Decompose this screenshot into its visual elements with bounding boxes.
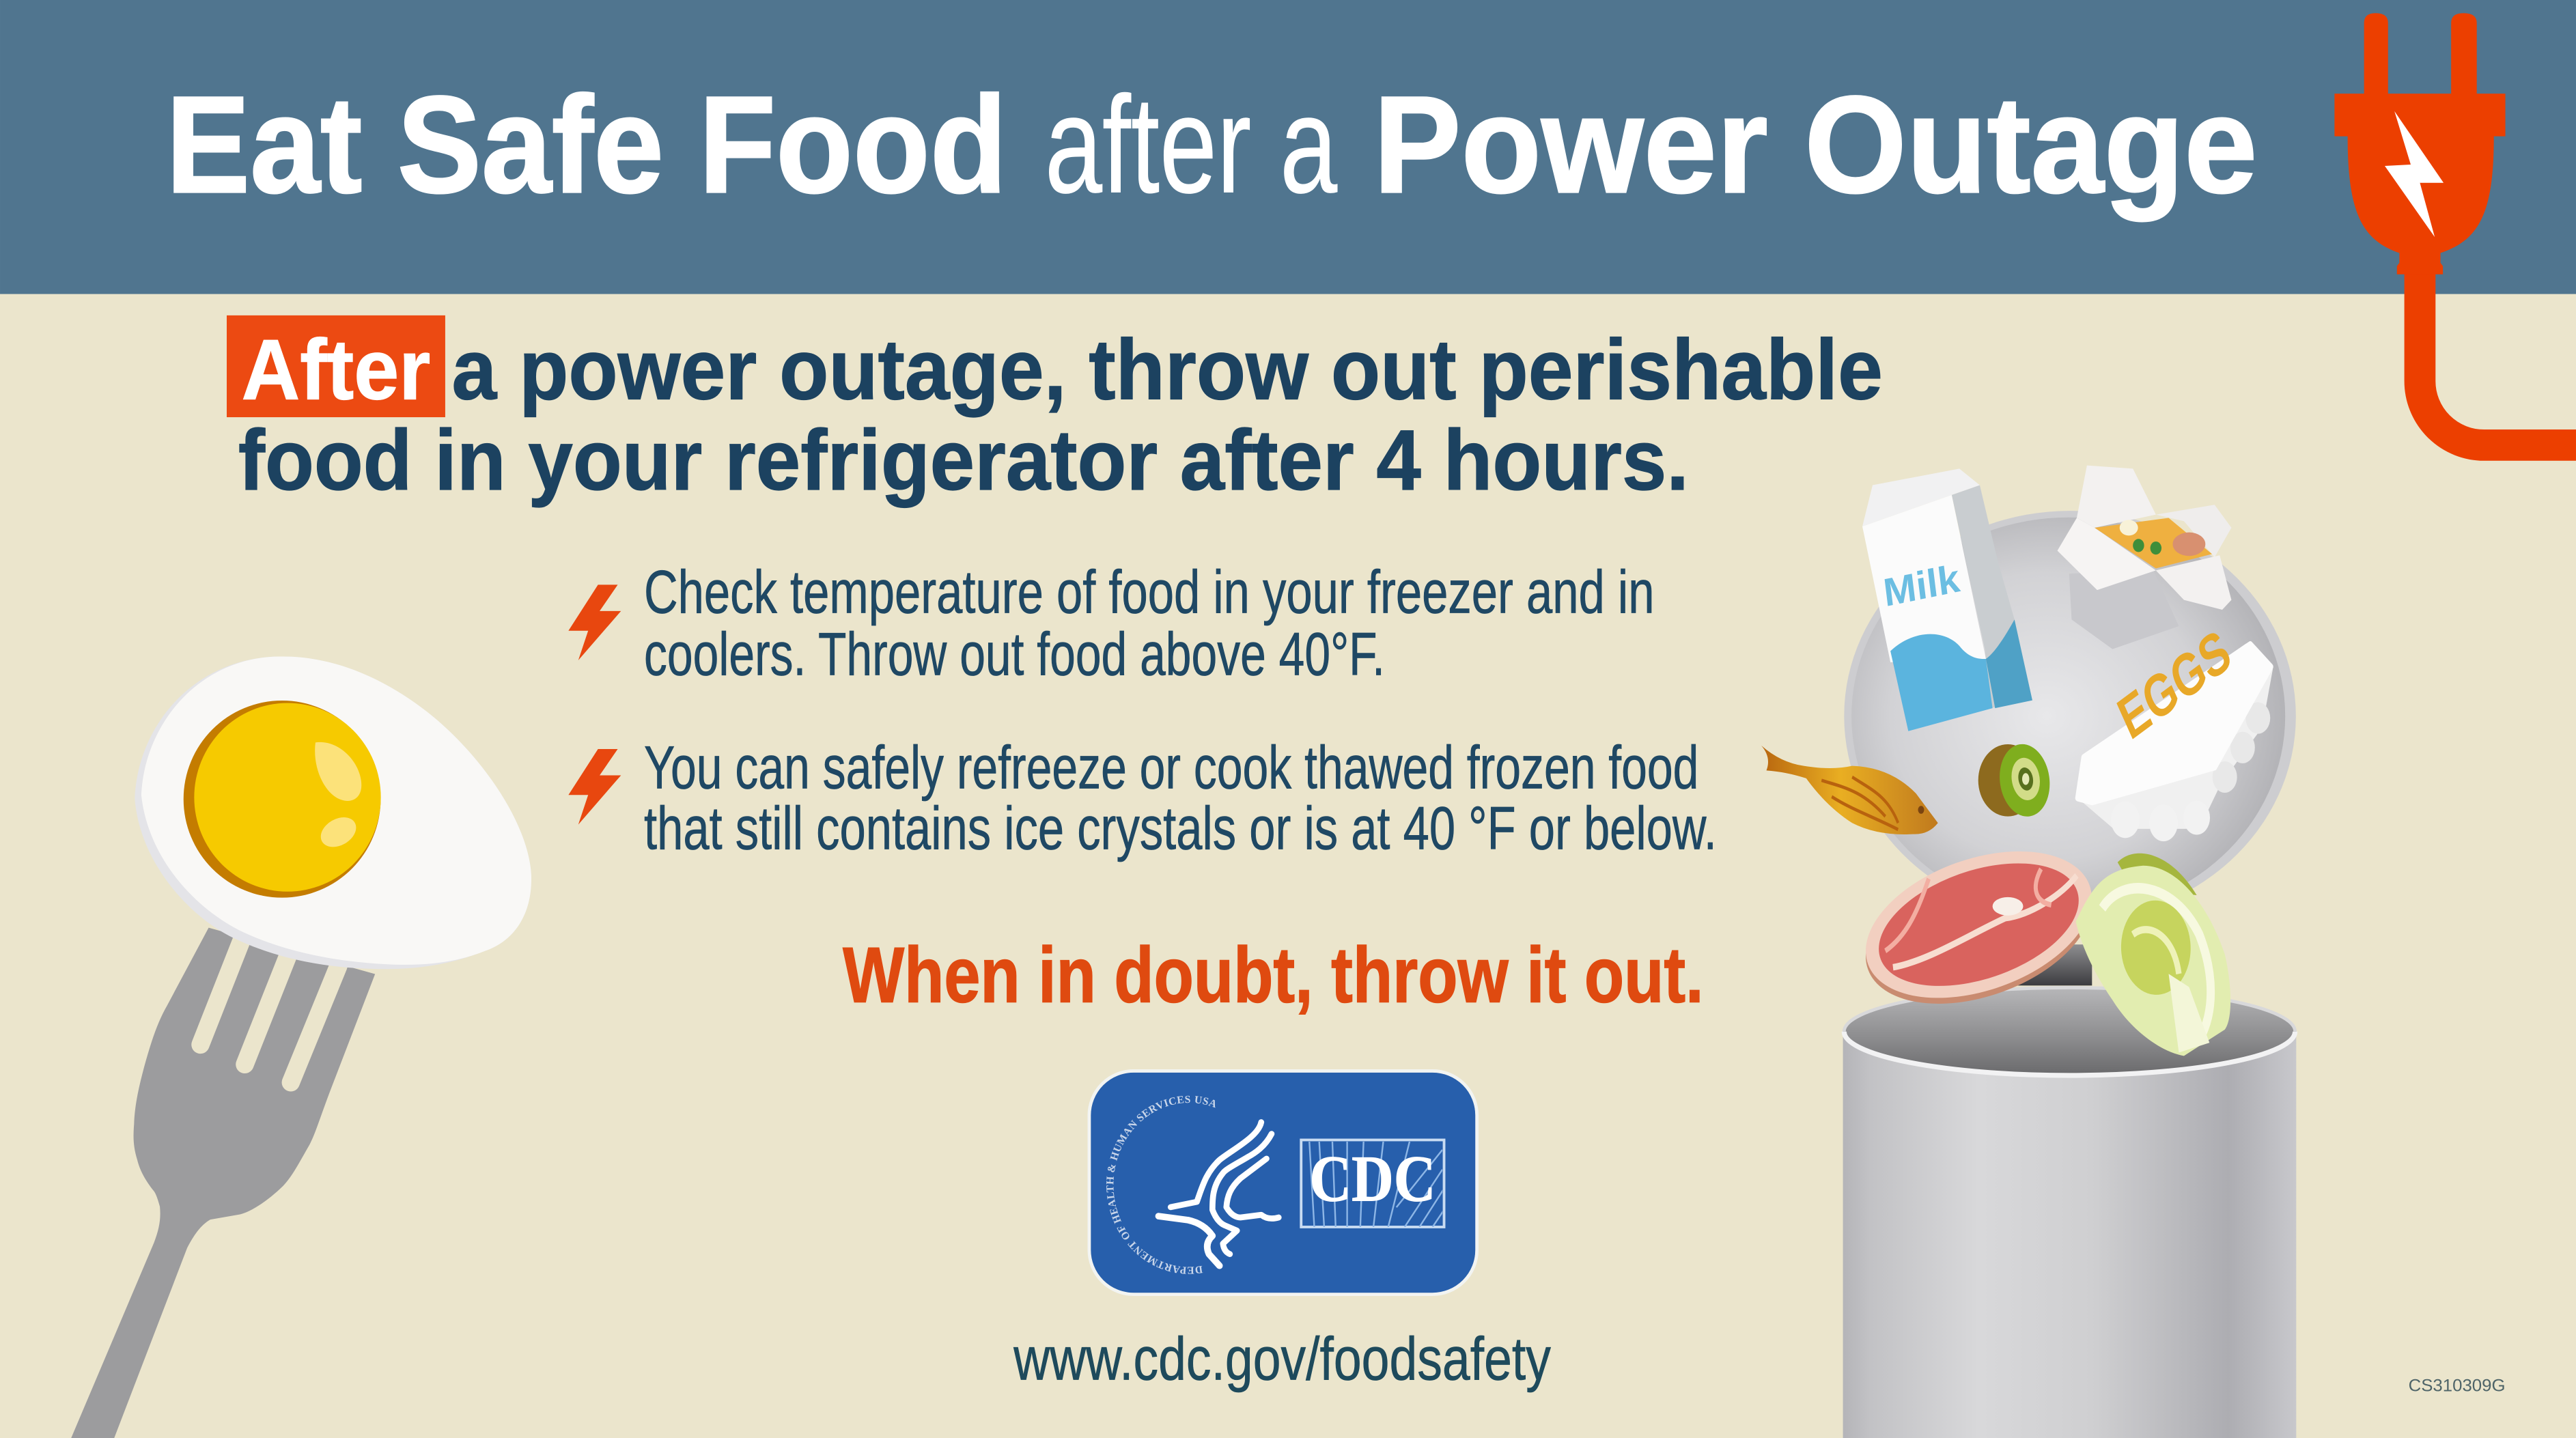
yolk bbox=[184, 701, 380, 898]
icon: fork bbox=[71, 928, 375, 1438]
document code: CS310309G bbox=[2409, 1377, 2506, 1396]
logo: HHS and CDC bbox=[1087, 1069, 1479, 1296]
lid handle bbox=[2015, 944, 2092, 985]
title: Power Outage bbox=[1373, 67, 2257, 221]
icon: takeout box bbox=[2058, 466, 2231, 649]
website url: www.cdc.gov/foodsafety bbox=[1013, 1325, 1551, 1393]
icon: fish bbox=[1761, 746, 1938, 834]
headline: food in your refrigerator after 4 hours. bbox=[238, 412, 1689, 508]
title: Eat Safe Food bbox=[166, 67, 1007, 221]
egg white bbox=[135, 656, 531, 969]
title banner bbox=[0, 0, 2576, 294]
icon: egg carton bbox=[2077, 617, 2271, 841]
seal text: DEPARTMENT OF HEALTH & HUMAN SERVICES USA bbox=[1106, 1095, 1216, 1274]
icon: plug lightning bolt bbox=[2385, 111, 2444, 237]
icon: milk carton: Milk bbox=[1881, 556, 1962, 615]
icon: milk carton bbox=[1862, 468, 2032, 731]
bullet text 1: Check temperature of food in your freezer and in bbox=[644, 557, 1654, 625]
icon: eagle bbox=[1158, 1123, 1278, 1266]
icon: trash can bbox=[1843, 987, 2296, 1438]
title: after a bbox=[1045, 67, 1338, 221]
callout: When in doubt, throw it out. bbox=[843, 931, 1704, 1019]
icon: meat steak bbox=[1855, 826, 2103, 1029]
bullet text 2 bbox=[644, 733, 1717, 862]
icon: egg carton: EGGS bbox=[2109, 617, 2239, 752]
icon: power plug with cord bbox=[2334, 13, 2576, 445]
bullet text 2: You can safely refreeze or cook thawed frozen food bbox=[644, 733, 1698, 802]
icon: bullet bolt 2 bbox=[568, 749, 621, 825]
headline: After bbox=[242, 322, 430, 418]
bullet text 1: coolers. Throw out food above 40°F. bbox=[644, 620, 1385, 688]
headline highlight box bbox=[227, 315, 445, 417]
headline: a power outage, throw out perishable bbox=[452, 322, 1883, 418]
falling food bbox=[1761, 466, 2271, 1056]
icon: fried egg bbox=[135, 656, 531, 969]
bullet text 2: that still contains ice crystals or is at 40 °F or below. bbox=[644, 794, 1717, 862]
CDC mark: CDC bbox=[1309, 1142, 1436, 1215]
title bbox=[166, 67, 2257, 221]
headline bbox=[238, 322, 1883, 508]
icon: lettuce bbox=[2075, 854, 2230, 1056]
yolk highlights bbox=[315, 742, 361, 801]
icon: bullet bolt 1 bbox=[568, 584, 621, 660]
icon: trash can lid bbox=[1844, 511, 2296, 985]
icon: kiwi bbox=[1978, 735, 2058, 826]
bullet text 1 bbox=[644, 557, 1654, 688]
